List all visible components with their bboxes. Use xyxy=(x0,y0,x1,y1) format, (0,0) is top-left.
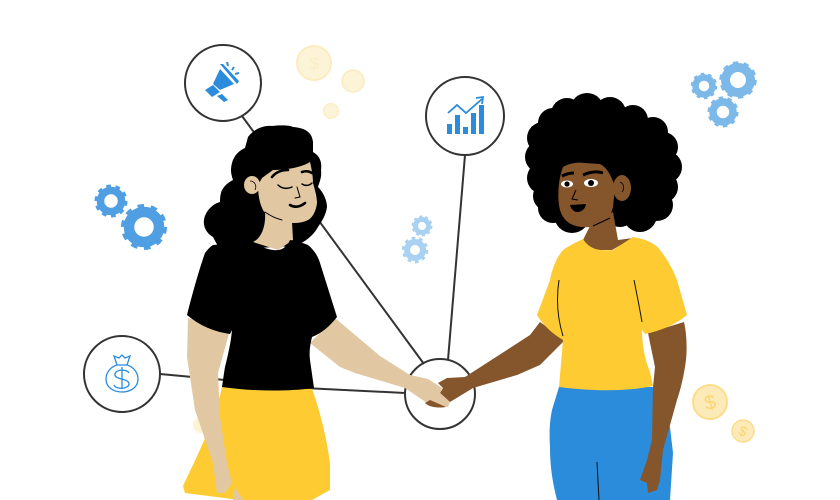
coins: bottom right: $ xyxy=(702,391,718,415)
connector lines xyxy=(160,116,465,393)
eyes and mouth xyxy=(265,170,312,220)
face xyxy=(258,162,317,223)
circle: growth chart xyxy=(426,77,504,155)
eyebrows, nose and mouth xyxy=(562,172,610,226)
handshake: finger sliver of the right woman's hand xyxy=(425,400,446,408)
circle: money bag xyxy=(84,336,160,412)
face xyxy=(558,163,615,227)
ear xyxy=(613,175,631,201)
coins: top centre xyxy=(297,46,364,118)
leg xyxy=(233,487,243,500)
coins: bottom right xyxy=(693,385,754,442)
neck xyxy=(253,212,293,250)
skirt xyxy=(183,387,330,500)
neck xyxy=(583,212,633,250)
icon: growth chart xyxy=(447,97,484,134)
icon: money bag xyxy=(106,355,138,392)
hair: afro xyxy=(525,93,682,233)
person: right woman xyxy=(438,93,687,500)
trousers xyxy=(550,387,673,500)
shirt xyxy=(187,240,337,391)
hair xyxy=(204,125,327,250)
ear xyxy=(244,176,260,194)
circle: megaphone xyxy=(185,45,261,121)
circle: handshake xyxy=(405,359,475,429)
right arm and hand xyxy=(310,318,450,407)
person: left woman xyxy=(183,125,450,500)
gears: top right xyxy=(692,63,755,126)
coin: behind left arm xyxy=(193,417,209,433)
icon: megaphone xyxy=(205,62,239,102)
coins: top centre: $ xyxy=(309,54,319,73)
right arm xyxy=(640,322,687,493)
shirt xyxy=(537,237,687,390)
gears: centre xyxy=(403,216,432,262)
gears: left xyxy=(96,186,165,248)
coins: bottom right: $ xyxy=(736,422,750,440)
left arm xyxy=(438,322,565,402)
eyes xyxy=(561,179,598,188)
left arm xyxy=(187,318,232,493)
